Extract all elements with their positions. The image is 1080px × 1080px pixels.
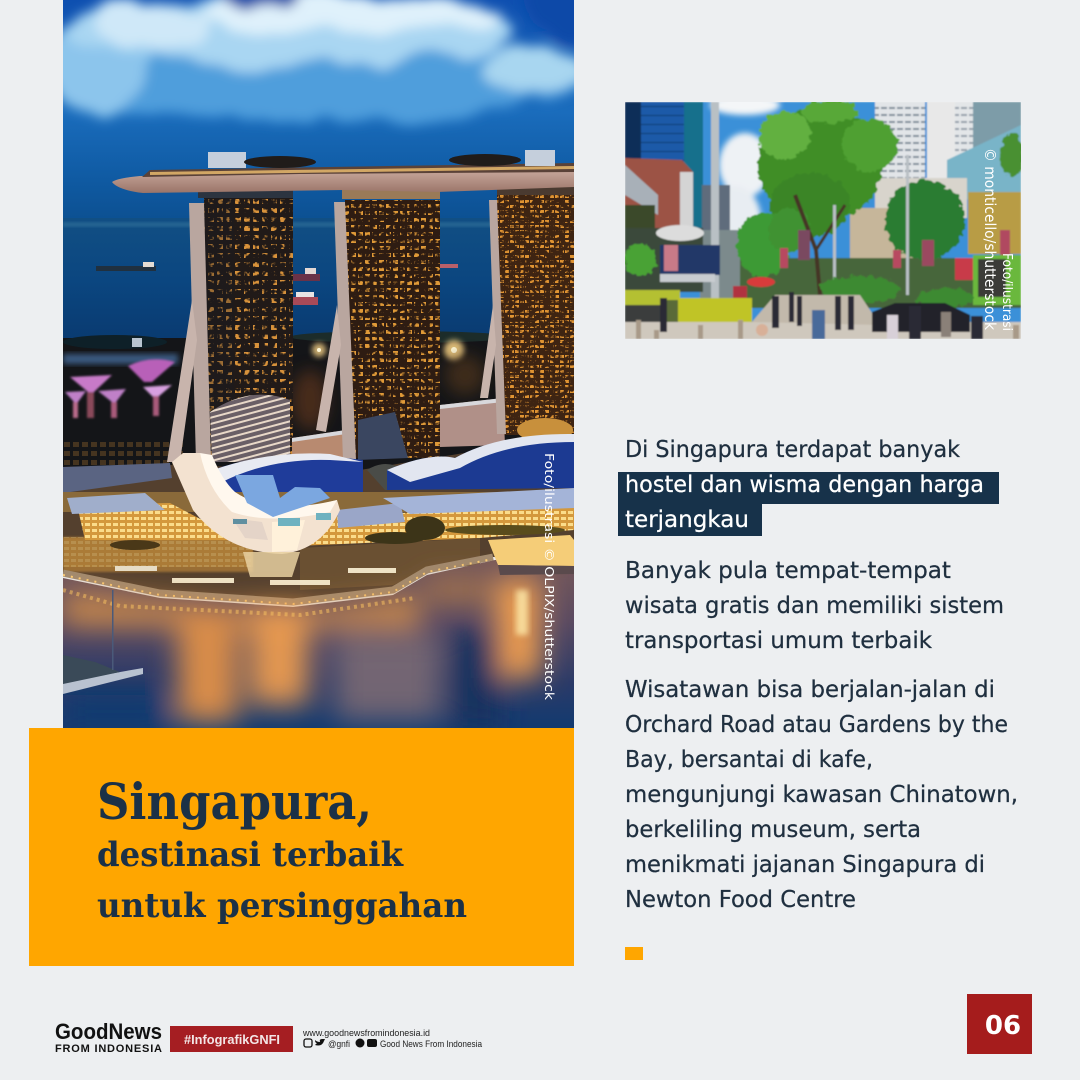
footer logo: GoodNews From Indonesia: GoodNews [55, 1019, 162, 1044]
text block 3 [625, 677, 1018, 913]
highlight bars [618, 472, 999, 536]
footer social links: @gnfi [328, 1039, 350, 1050]
striped dome [210, 395, 290, 462]
photo credit: Foto/ilustrasi © OLPIX/shutterstock [542, 453, 557, 701]
office towers [625, 102, 1021, 308]
subtitle line 2: untuk persinggahan [97, 886, 467, 926]
photo credit 1: © monticello/shutterstock [981, 148, 999, 330]
far shore and Gardens by the Bay [63, 332, 522, 470]
footer social links: Good News From Indonesia [380, 1039, 483, 1050]
text block 3: Orchard Road atau Gardens by the [625, 712, 1008, 738]
page number badge: 06 [985, 1011, 1021, 1041]
pedestrians [660, 292, 983, 339]
text block 1: hostel dan wisma dengan harga [625, 472, 984, 498]
tower legs [167, 200, 506, 462]
ships [96, 262, 458, 305]
sky [63, 0, 574, 225]
mid-ground greenery [820, 276, 973, 308]
icon: youtube [367, 1039, 377, 1047]
text block 3: Bay, bersantai di kafe, [625, 747, 873, 773]
floating pavilion [488, 535, 574, 575]
car [872, 303, 970, 332]
hashtag badge [170, 1026, 293, 1052]
photo credit 2: Foto/ilustrasi [999, 253, 1014, 331]
SkyPark deck [112, 150, 574, 199]
street lamps and poles [710, 102, 910, 300]
title panel [29, 728, 574, 966]
mall and promenade [63, 435, 574, 604]
text block 2: Banyak pula tempat-tempat [625, 558, 951, 584]
tree canopies [624, 100, 1024, 277]
subtitle line 1: destinasi terbaik [97, 835, 404, 875]
tower 1 [204, 197, 293, 462]
icon: twitter [315, 1039, 325, 1046]
ArtScience Museum [172, 453, 340, 577]
icon: facebook [356, 1038, 364, 1048]
street scene [624, 95, 1024, 339]
pavement [625, 322, 1021, 339]
page number badge [967, 994, 1032, 1054]
sea [63, 218, 493, 338]
text block 3: menikmati jajanan Singapura di [625, 852, 985, 878]
title: Singapura: Singapura, [97, 772, 372, 831]
orange accent square [625, 947, 643, 960]
text block 1 [618, 437, 999, 536]
bollards [636, 320, 1019, 339]
text block 3: berkeliling museum, serta [625, 817, 921, 843]
text block 2: transportasi umum terbaik [625, 628, 933, 654]
promenade [63, 557, 493, 602]
hedge [625, 290, 752, 326]
panel: main photo of Marina Bay Sands [45, 0, 603, 728]
banners and signage [656, 225, 1021, 308]
pier at lower left [63, 590, 143, 694]
footer social links [302, 1028, 483, 1050]
sky and clouds [678, 102, 1021, 323]
panel: street photo of Orchard Road [624, 95, 1024, 339]
text block 2: wisata gratis dan memiliki sistem [625, 593, 1004, 619]
tower 2 [292, 200, 440, 460]
text block 1: terjangkau [625, 507, 749, 533]
tower 3 [440, 195, 574, 447]
icon: instagram [304, 1039, 312, 1047]
bay water with reflections [63, 550, 574, 728]
clouds [45, 0, 603, 122]
text block 2 [625, 558, 1004, 654]
text block 3: Wisatawan bisa berjalan-jalan di [625, 677, 995, 703]
text block 3: mengunjungi kawasan Chinatown, [625, 782, 1018, 808]
footer logo: GoodNews From Indonesia [55, 1019, 162, 1055]
hashtag badge: #InfografikGNFI [184, 1032, 280, 1047]
footer social links: www.goodnewsfromindonesia.id [302, 1028, 430, 1039]
footer logo: GoodNews From Indonesia: FROM INDONESIA [55, 1043, 162, 1055]
blue domed roofs [213, 434, 574, 492]
trunks [795, 195, 845, 295]
text block 1: Di Singapura terdapat banyak [625, 437, 961, 463]
text block 3: Newton Food Centre [625, 887, 856, 913]
